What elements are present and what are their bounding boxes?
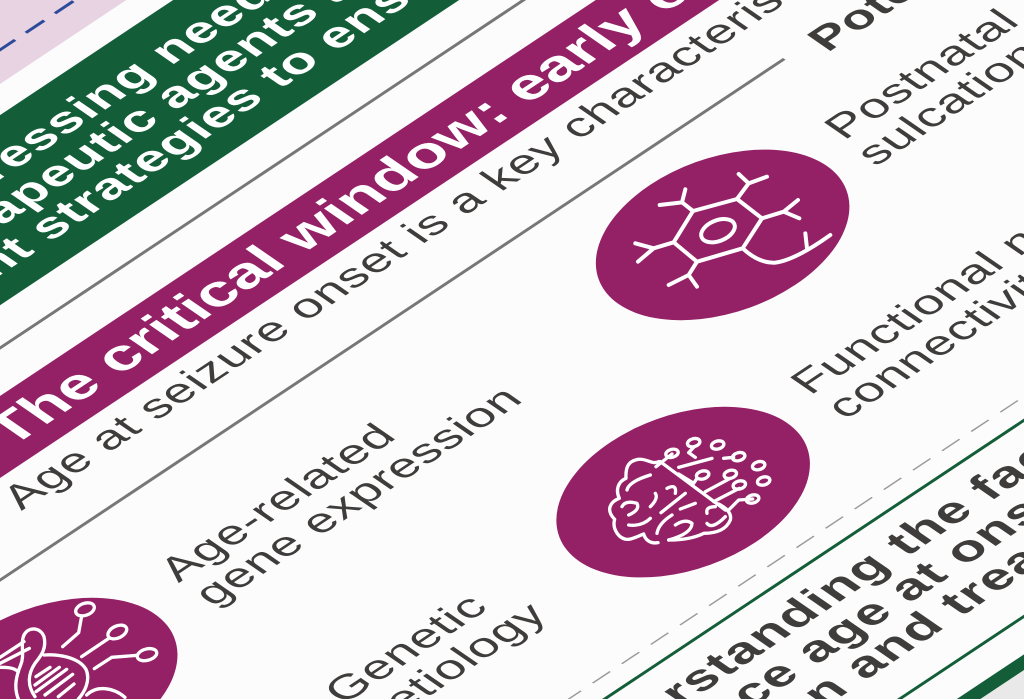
panel: grey footer with green top edge bbox=[217, 85, 1024, 699]
text: genetic aetiology bbox=[313, 570, 557, 699]
icon: DNA with nodes bbox=[0, 564, 227, 699]
text: postnatal sulcation: Postnatal bbox=[813, 2, 1024, 146]
dashed divider bbox=[564, 363, 1024, 699]
text: age-related gene expression: gene expression bbox=[183, 379, 532, 612]
panel: pink top section with dashed line bbox=[0, 0, 957, 554]
icon: neuron bbox=[546, 116, 899, 354]
icon: brain circuit bbox=[507, 373, 860, 611]
text: age-related gene expression: Age-related bbox=[148, 416, 406, 588]
divider line below subheading bbox=[0, 59, 784, 699]
